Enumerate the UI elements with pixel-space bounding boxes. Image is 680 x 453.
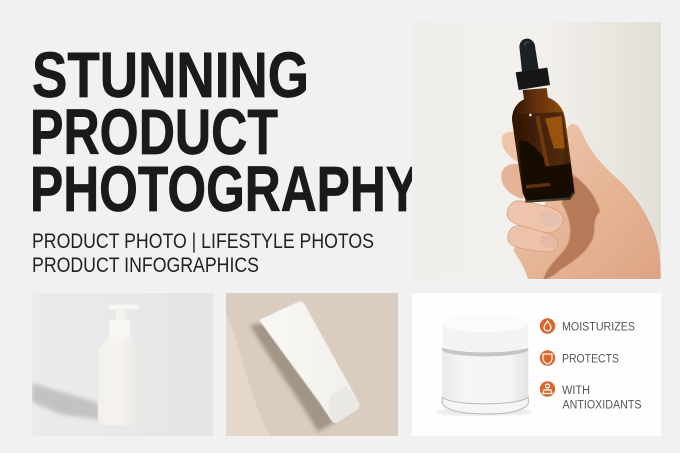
panel: dropper bottle in hand: [412, 22, 661, 280]
amber bottle: [512, 88, 575, 203]
benefit: with antioxidants: ANTIOXIDANTS: [562, 400, 642, 412]
title: PHOTOGRAPHY: [30, 153, 419, 225]
benefit: with antioxidants: WITH: [562, 385, 590, 397]
title: [30, 39, 419, 225]
glass jar: [442, 315, 528, 414]
subtitle: [32, 230, 374, 277]
hand: [501, 124, 661, 280]
benefit: protects: PROTECTS: [562, 354, 619, 366]
bottle shadow: [32, 383, 100, 420]
benefit: with antioxidants: [540, 381, 642, 412]
pump bottle: [98, 304, 141, 425]
jar shadow: [436, 408, 532, 416]
cream tube: [259, 302, 359, 423]
benefit: moisturizes: MOISTURIZES: [562, 322, 635, 334]
title: STUNNING: [32, 39, 309, 111]
title: PRODUCT: [30, 96, 278, 168]
benefit: protects: [540, 350, 619, 366]
tube shadow: [250, 323, 338, 432]
panel: cream tube on fabric: [226, 293, 398, 436]
fabric fold: [226, 314, 270, 436]
panel: pump bottle: [32, 293, 213, 436]
subtitle: PRODUCT INFOGRAPHICS: [32, 254, 259, 277]
benefit: moisturizes: [540, 318, 635, 334]
panel: jar with benefits: [412, 293, 661, 436]
subtitle: PRODUCT PHOTO | LIFESTYLE PHOTOS: [32, 230, 374, 253]
dropper cap: [516, 39, 550, 90]
